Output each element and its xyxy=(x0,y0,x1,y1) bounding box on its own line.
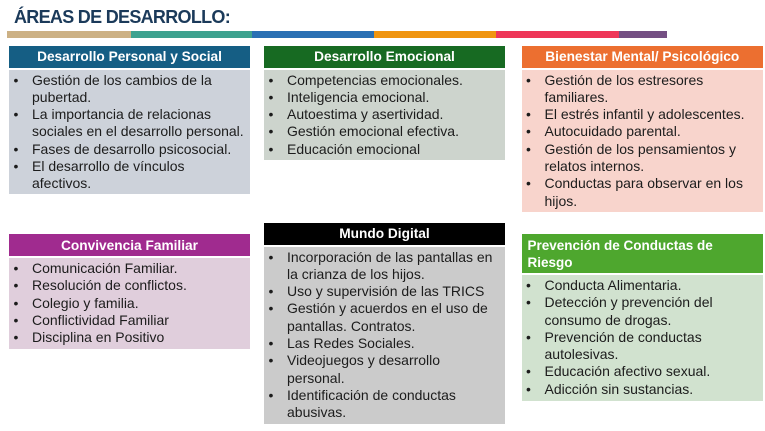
panel list: Autoestima y asertividad. xyxy=(287,106,443,122)
panel list: Conflictividad Familiar xyxy=(32,312,169,328)
panel list: pantallas. Contratos. xyxy=(287,318,415,334)
panel heading: Desarrollo Emocional xyxy=(314,49,455,64)
panel list: Comunicación Familiar. xyxy=(32,260,178,276)
panel: Convivencia Familiar xyxy=(9,234,250,349)
panel list: Competencias emocionales. xyxy=(287,72,463,88)
panel list: Incorporación de las pantallas en xyxy=(287,248,492,264)
panel list: autolesivas. xyxy=(544,346,618,362)
panel heading: Mundo Digital xyxy=(339,226,430,241)
panel list: Fases de desarrollo psicosocial. xyxy=(32,141,231,157)
panel list: Inteligencia emocional. xyxy=(287,89,429,105)
panel list: Conducta Alimentaria. xyxy=(544,277,681,293)
panel heading xyxy=(9,234,250,256)
panel list xyxy=(264,246,505,424)
panel: Bienestar Mental / Psicológico xyxy=(522,46,763,212)
panel list: Gestión de los cambios de la xyxy=(32,72,212,88)
panel list xyxy=(522,275,763,400)
panel list: relatos internos. xyxy=(544,158,644,174)
panel list: Gestión emocional efectiva. xyxy=(287,123,459,139)
panel list: Gestión de los estresores xyxy=(544,72,703,88)
panel list: Videojuegos y desarrollo xyxy=(287,352,440,368)
panel list: Gestión de los pensamientos y xyxy=(544,141,736,157)
panel list: personal. xyxy=(287,370,345,386)
title: ÁREAS DE DESARROLLO: xyxy=(14,7,230,27)
panel list: El estrés infantil y adolescentes. xyxy=(544,106,744,122)
panel: Mundo Digital xyxy=(264,223,505,424)
panel list: Gestión y acuerdos en el uso de xyxy=(287,300,488,316)
panel list: pubertad. xyxy=(32,89,91,105)
panel list: la crianza de los hijos. xyxy=(287,266,425,282)
panel list: sociales en el desarrollo personal. xyxy=(32,123,244,139)
panel list: Identificación de conductas xyxy=(287,387,456,403)
panel heading xyxy=(522,46,763,68)
panel heading: Convivencia Familiar xyxy=(61,238,198,252)
panel list: hijos. xyxy=(544,193,577,209)
panel heading xyxy=(9,46,250,68)
panel list: Uso y supervisión de las TRICS xyxy=(287,283,484,299)
panel list: Adicción sin sustancias. xyxy=(544,381,693,397)
panel list: afectivos. xyxy=(32,175,91,191)
panel list xyxy=(9,258,250,348)
panel list: Detección y prevención del xyxy=(544,294,713,310)
panel list: Prevención de conductas xyxy=(544,329,702,345)
panel list: El desarrollo de vínculos xyxy=(32,158,185,174)
panel list: Conductas para observar en los xyxy=(544,175,743,191)
panel list: Las Redes Sociales. xyxy=(287,335,415,351)
panel: Prevención de Conductas de Riesgo xyxy=(522,234,763,401)
panel heading: Prevención de Conductas de xyxy=(528,238,713,252)
panel heading xyxy=(264,222,505,244)
panel list: Disciplina en Positivo xyxy=(32,329,164,345)
panel heading: Desarrollo Personal y Social xyxy=(37,49,222,64)
panel list: Educación emocional xyxy=(287,141,420,157)
panel: Desarrollo Personal y Social xyxy=(9,46,250,194)
panel list xyxy=(264,70,505,160)
panel list xyxy=(522,70,763,212)
panel list: consumo de drogas. xyxy=(544,312,671,328)
panel heading: Bienestar Mental/ Psicológico xyxy=(545,49,739,64)
panel list: familiares. xyxy=(544,89,608,105)
panel list: Colegio y familia. xyxy=(32,295,139,311)
panel heading xyxy=(522,234,763,273)
panel list: Resolución de conflictos. xyxy=(32,277,187,293)
panel list xyxy=(9,70,250,194)
multicolour divider bar xyxy=(7,31,667,38)
panel heading: Riesgo xyxy=(528,255,573,270)
panel list: Autocuidado parental. xyxy=(544,123,681,139)
panel list: Educación afectivo sexual. xyxy=(544,363,710,379)
panel list: abusivas. xyxy=(287,404,346,420)
panel: Desarrollo Emocional xyxy=(264,46,505,160)
panel list: La importancia de relacionas xyxy=(32,106,211,122)
panel heading xyxy=(264,46,505,68)
